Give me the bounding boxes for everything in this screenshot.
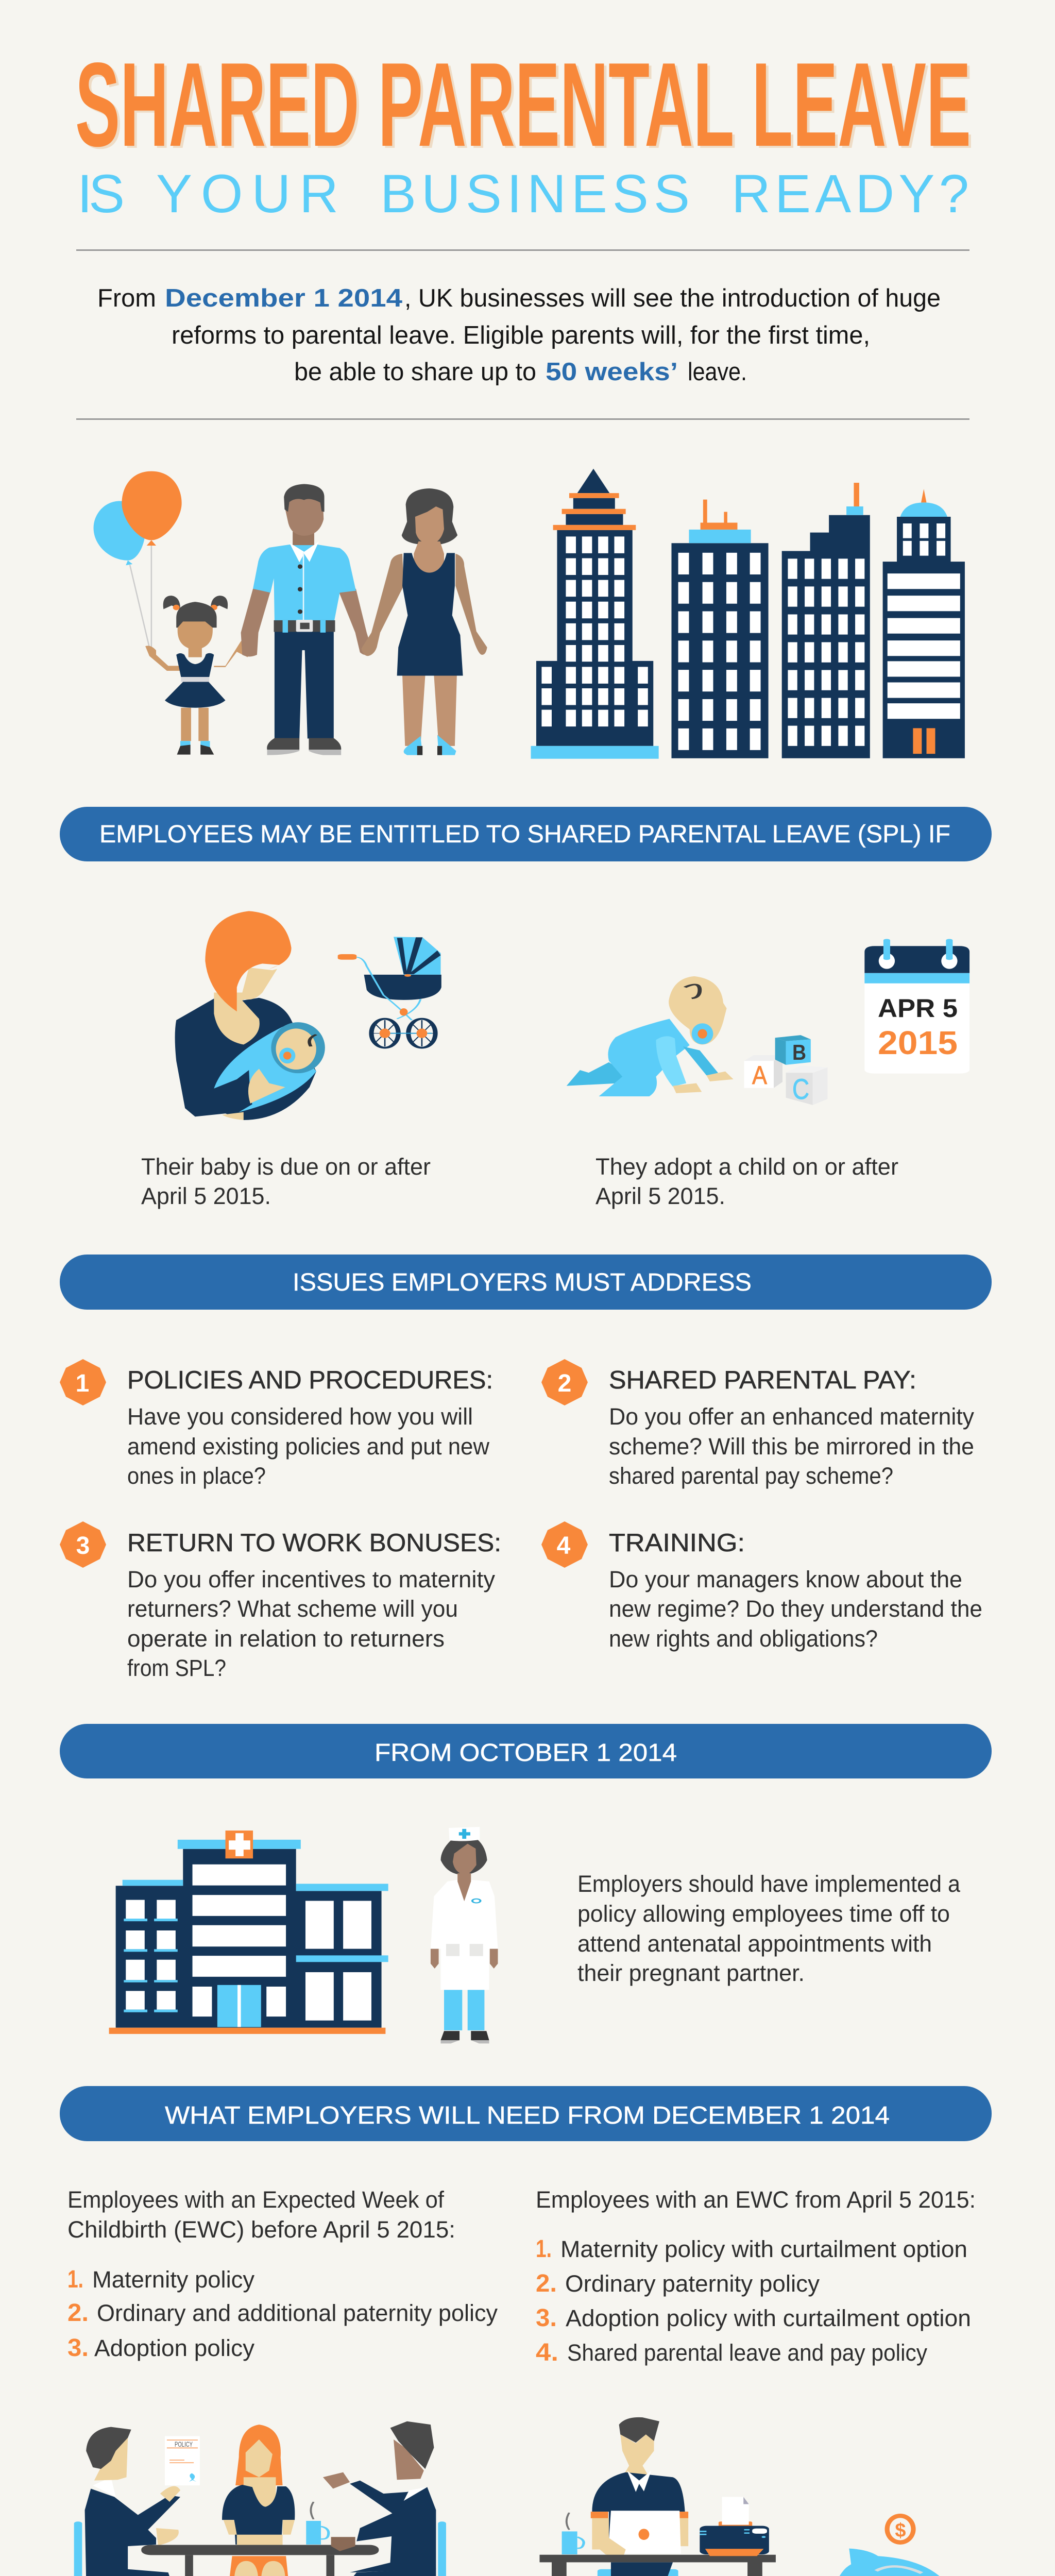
- issue 4: training: new rights and obligations?: [609, 1625, 878, 1652]
- printer: [700, 2497, 769, 2556]
- man: [241, 484, 372, 755]
- right column: from april 5 2015: 1.: [536, 2235, 552, 2263]
- meeting table: [185, 2555, 334, 2576]
- issue 3: return to work bonuses: [60, 1521, 501, 1681]
- building 1: [531, 469, 659, 759]
- left column: before april 5 2015: 3.: [67, 2334, 89, 2362]
- issue 1: policies and procedures: Have you considered how you will: [127, 1403, 473, 1430]
- left column: before april 5 2015: [67, 2187, 498, 2362]
- left column: before april 5 2015: 1.: [67, 2266, 83, 2293]
- left column: before april 5 2015: Adoption policy: [94, 2335, 255, 2361]
- banner: issues: ISSUES EMPLOYERS MUST ADDRESS: [293, 1269, 752, 1296]
- issue 3: return to work bonuses: RETURN TO WORK BONUSES:: [127, 1529, 501, 1557]
- right column: from april 5 2015: Ordinary paternity policy: [565, 2270, 820, 2297]
- block letters: C: [792, 1073, 809, 1105]
- banner: issues: [60, 1255, 992, 1310]
- left man holding policy: [85, 2427, 192, 2576]
- desk worker: [539, 2417, 776, 2576]
- subtitle: READY?: [731, 164, 969, 224]
- issue 3: return to work bonuses: operate in relation to returners: [127, 1625, 445, 1652]
- building 2: [671, 500, 769, 758]
- coffee mug: [306, 2502, 329, 2545]
- left column: before april 5 2015: Employees with an Expected Week of: [67, 2187, 444, 2213]
- icon: balloons: [94, 471, 182, 648]
- issue 2: shared parental pay: [541, 1359, 974, 1489]
- badge 4: 4: [557, 1532, 571, 1560]
- subtitle: YOUR: [156, 164, 338, 224]
- badge 1: [60, 1359, 106, 1405]
- banner: employees may be entitled: [60, 807, 992, 861]
- issue 4: training: new regime? Do they understand the: [609, 1596, 982, 1622]
- building 3: [782, 483, 870, 758]
- right column: from april 5 2015: [536, 2187, 976, 2366]
- text: baby due: [141, 1154, 431, 1209]
- banner: what employers will need december: WHAT EMPLOYERS WILL NEED FROM DECEMBER 1 2014: [165, 2102, 890, 2129]
- intro paragraph: leave.: [688, 358, 747, 386]
- badge 1: 1: [76, 1370, 89, 1397]
- issue 2: shared parental pay: SHARED PARENTAL PAY:: [609, 1366, 916, 1394]
- alphabet blocks: [744, 1035, 828, 1105]
- badge 3: [60, 1521, 106, 1568]
- crawling baby: [567, 976, 734, 1096]
- policy document label: POLICY: [175, 2440, 193, 2448]
- issue 3: return to work bonuses: from SPL?: [127, 1655, 226, 1681]
- calendar date: APR 5: [878, 994, 958, 1023]
- block letters: [752, 1040, 809, 1105]
- subtitle: BUSINESS: [380, 164, 690, 224]
- badge 4: [541, 1521, 588, 1568]
- text: adopt a child: April 5 2015.: [595, 1183, 725, 1209]
- icon: calendar: [864, 939, 969, 1074]
- issue 1: policies and procedures: [60, 1359, 493, 1489]
- policy document: [165, 2436, 200, 2485]
- child: [145, 596, 253, 755]
- intro paragraph: [97, 284, 941, 386]
- intro paragraph: December 1 2014: [165, 284, 402, 312]
- intro paragraph: From: [97, 284, 156, 312]
- banner: what employers will need december: [60, 2086, 992, 2141]
- right column: from april 5 2015: Employees with an EWC from April 5 2015:: [536, 2187, 976, 2213]
- text: employers antenatal policy: Employers should have implemented a: [577, 1871, 961, 1897]
- icon: pram: [338, 937, 441, 1048]
- issue 2: shared parental pay: Do you offer an enhanced maternity: [609, 1403, 974, 1430]
- block letters: A: [752, 1061, 768, 1090]
- text: employers antenatal policy: attend antenatal appointments with: [577, 1930, 932, 1957]
- building 4: [883, 489, 965, 758]
- right column: from april 5 2015: Adoption policy with curtailment option: [566, 2305, 971, 2331]
- right column: from april 5 2015: Shared parental leave and pay policy: [567, 2340, 927, 2366]
- badge 2: 2: [558, 1370, 571, 1397]
- issue 3: return to work bonuses: returners? What scheme will you: [127, 1596, 458, 1622]
- banner: employees may be entitled: EMPLOYEES MAY BE ENTITLED TO SHARED PARENTAL LEAVE (SPL) IF: [99, 821, 950, 848]
- left column: before april 5 2015: 2.: [67, 2299, 89, 2327]
- badge 2: [541, 1359, 588, 1405]
- right column: from april 5 2015: 2.: [536, 2270, 557, 2297]
- issue 1: policies and procedures: amend existing policies and put new: [127, 1433, 489, 1460]
- illustration: hospital and nurse: [109, 1827, 498, 2043]
- woman: [361, 488, 487, 755]
- mother: [175, 911, 325, 1120]
- illustration: city buildings: [531, 469, 965, 759]
- text: baby due: April 5 2015.: [141, 1183, 271, 1209]
- coffee mug: [562, 2513, 584, 2554]
- intro paragraph: 50 weeks’: [546, 358, 678, 386]
- issue 1: policies and procedures: POLICIES AND PROCEDURES:: [127, 1366, 493, 1394]
- issue 4: training: TRAINING:: [609, 1529, 745, 1557]
- text: adopt a child: They adopt a child on or after: [595, 1154, 898, 1180]
- hospital: [109, 1831, 388, 2034]
- right column: from april 5 2015: 4.: [536, 2339, 558, 2366]
- nurse: [431, 1827, 498, 2043]
- issue 1: policies and procedures: ones in place?: [127, 1463, 266, 1489]
- text: baby due: Their baby is due on or after: [141, 1154, 431, 1180]
- issue 4: training: Do your managers know about the: [609, 1566, 962, 1592]
- banner: from october: [60, 1724, 992, 1778]
- banner: from october: FROM OCTOBER 1 2014: [375, 1739, 677, 1767]
- illustration: person at desk: [539, 2417, 976, 2576]
- subtitle: IS: [77, 164, 125, 224]
- right column: from april 5 2015: 3.: [536, 2304, 557, 2332]
- issue 2: shared parental pay: shared parental pay scheme?: [609, 1463, 893, 1489]
- issue 4: training: [541, 1521, 982, 1652]
- office chairs: [73, 2521, 448, 2576]
- text: employers antenatal policy: policy allowing employees time off to: [577, 1901, 950, 1927]
- left column: before april 5 2015: Childbirth (EWC) before April 5 2015:: [67, 2216, 455, 2243]
- intro paragraph: reforms to parental leave. Eligible parents will, for the first time,: [172, 321, 870, 349]
- right column: from april 5 2015: Maternity policy with curtailment option: [560, 2236, 967, 2262]
- intro paragraph: , UK businesses will see the introduction of huge: [404, 284, 941, 312]
- icon: piggy bank: [819, 2514, 976, 2576]
- woman at table: [141, 2425, 379, 2576]
- right man gesturing: [323, 2421, 436, 2576]
- left column: before april 5 2015: Maternity policy: [92, 2266, 254, 2293]
- illustration: mother with baby and pram: [175, 911, 969, 1120]
- illustration: family with balloons: [94, 471, 487, 755]
- badge 3: 3: [76, 1532, 90, 1560]
- issue 2: shared parental pay: scheme? Will this be mirrored in the: [609, 1433, 974, 1460]
- coin dollar sign: $: [895, 2520, 906, 2541]
- text: adopt a child: [595, 1154, 898, 1209]
- issue 3: return to work bonuses: Do you offer incentives to maternity: [127, 1566, 496, 1592]
- intro paragraph: be able to share up to: [294, 358, 536, 386]
- text: employers antenatal policy: their pregnant partner.: [577, 1960, 805, 1986]
- block letters: B: [792, 1040, 806, 1064]
- illustration: meeting scene: [73, 2421, 448, 2576]
- left column: before april 5 2015: Ordinary and additional paternity policy: [97, 2300, 498, 2326]
- text: employers antenatal policy: [577, 1871, 961, 1986]
- calendar date: 2015: [878, 1024, 958, 1061]
- subtitle: [77, 164, 969, 224]
- calendar date: [878, 994, 958, 1061]
